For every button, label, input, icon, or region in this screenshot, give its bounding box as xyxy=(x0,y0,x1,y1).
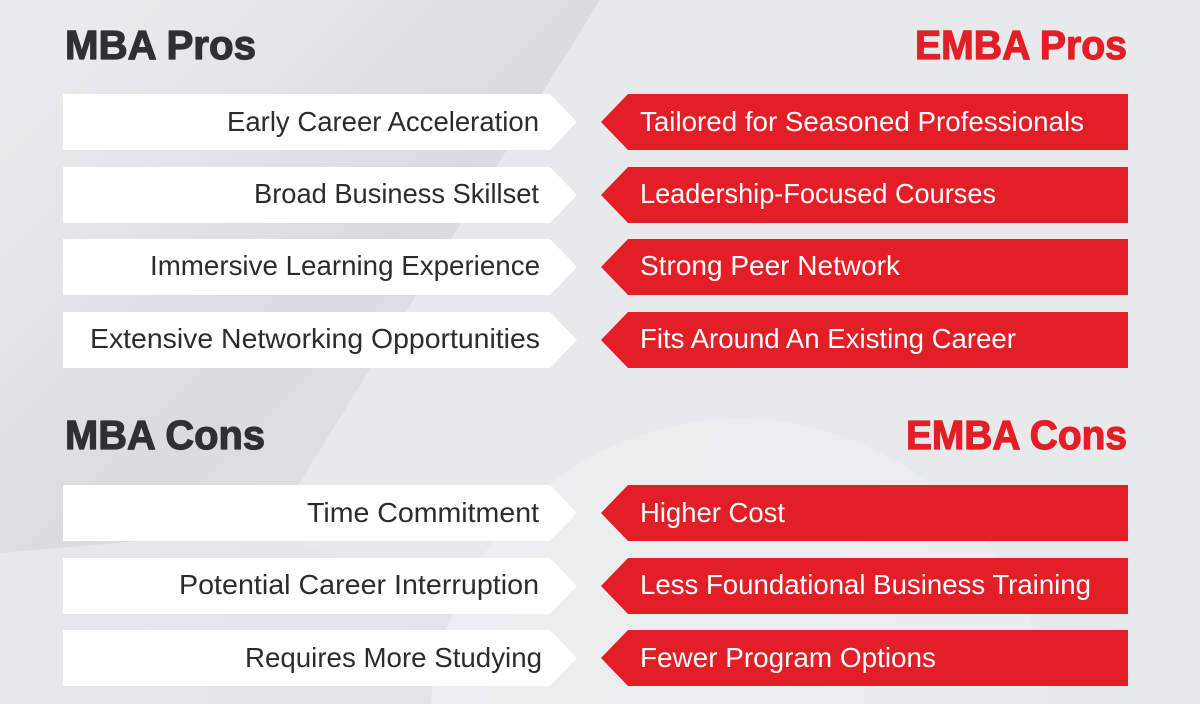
heading: EMBA Pros: EMBA Pros xyxy=(915,22,1127,68)
panel: MBA pros list xyxy=(63,94,577,368)
item: Tailored for Seasoned Professionals xyxy=(601,94,1128,150)
item: Extensive Networking Opportunities xyxy=(63,312,577,368)
item: Requires More Studying: Requires More Studying xyxy=(245,642,542,673)
item: Less Foundational Business Training xyxy=(601,558,1128,614)
item: Fewer Program Options: Fewer Program Options xyxy=(640,642,936,673)
item: Higher Cost: Higher Cost xyxy=(640,497,785,528)
item: Immersive Learning Experience xyxy=(63,239,577,295)
item: Fits Around An Existing Career: Fits Around An Existing Career xyxy=(640,323,1016,354)
item: Time Commitment xyxy=(63,485,577,541)
heading: MBA Pros: MBA Pros xyxy=(65,22,256,68)
item: Leadership-Focused Courses xyxy=(601,167,1128,223)
panel: MBA cons list xyxy=(63,485,577,686)
item: Strong Peer Network: Strong Peer Network xyxy=(640,250,900,281)
heading: EMBA Cons: EMBA Cons xyxy=(906,412,1127,458)
item: Fewer Program Options xyxy=(601,630,1128,686)
item: Extensive Networking Opportunities: Extensive Networking Opportunities xyxy=(90,323,540,354)
item: Early Career Acceleration: Early Career Acceleration xyxy=(227,106,539,137)
item: Broad Business Skillset xyxy=(63,167,577,223)
item: Higher Cost xyxy=(601,485,1128,541)
heading: MBA Cons: MBA Cons xyxy=(65,412,265,458)
panel: EMBA cons list xyxy=(601,485,1128,686)
item: Less Foundational Business Training: Less Foundational Business Training xyxy=(640,569,1091,600)
item: Tailored for Seasoned Professionals: Tailored for Seasoned Professionals xyxy=(640,106,1084,137)
item: Potential Career Interruption: Potential Career Interruption xyxy=(179,569,539,600)
item: Potential Career Interruption xyxy=(63,558,577,614)
item: Fits Around An Existing Career xyxy=(601,312,1128,368)
item: Immersive Learning Experience: Immersive Learning Experience xyxy=(150,250,540,281)
item: Time Commitment: Time Commitment xyxy=(307,497,539,528)
item: Early Career Acceleration xyxy=(63,94,577,150)
panel: EMBA pros list xyxy=(601,94,1128,368)
item: Requires More Studying xyxy=(63,630,577,686)
item: Leadership-Focused Courses: Leadership-Focused Courses xyxy=(640,178,996,209)
item: Broad Business Skillset: Broad Business Skillset xyxy=(254,178,539,209)
item: Strong Peer Network xyxy=(601,239,1128,295)
